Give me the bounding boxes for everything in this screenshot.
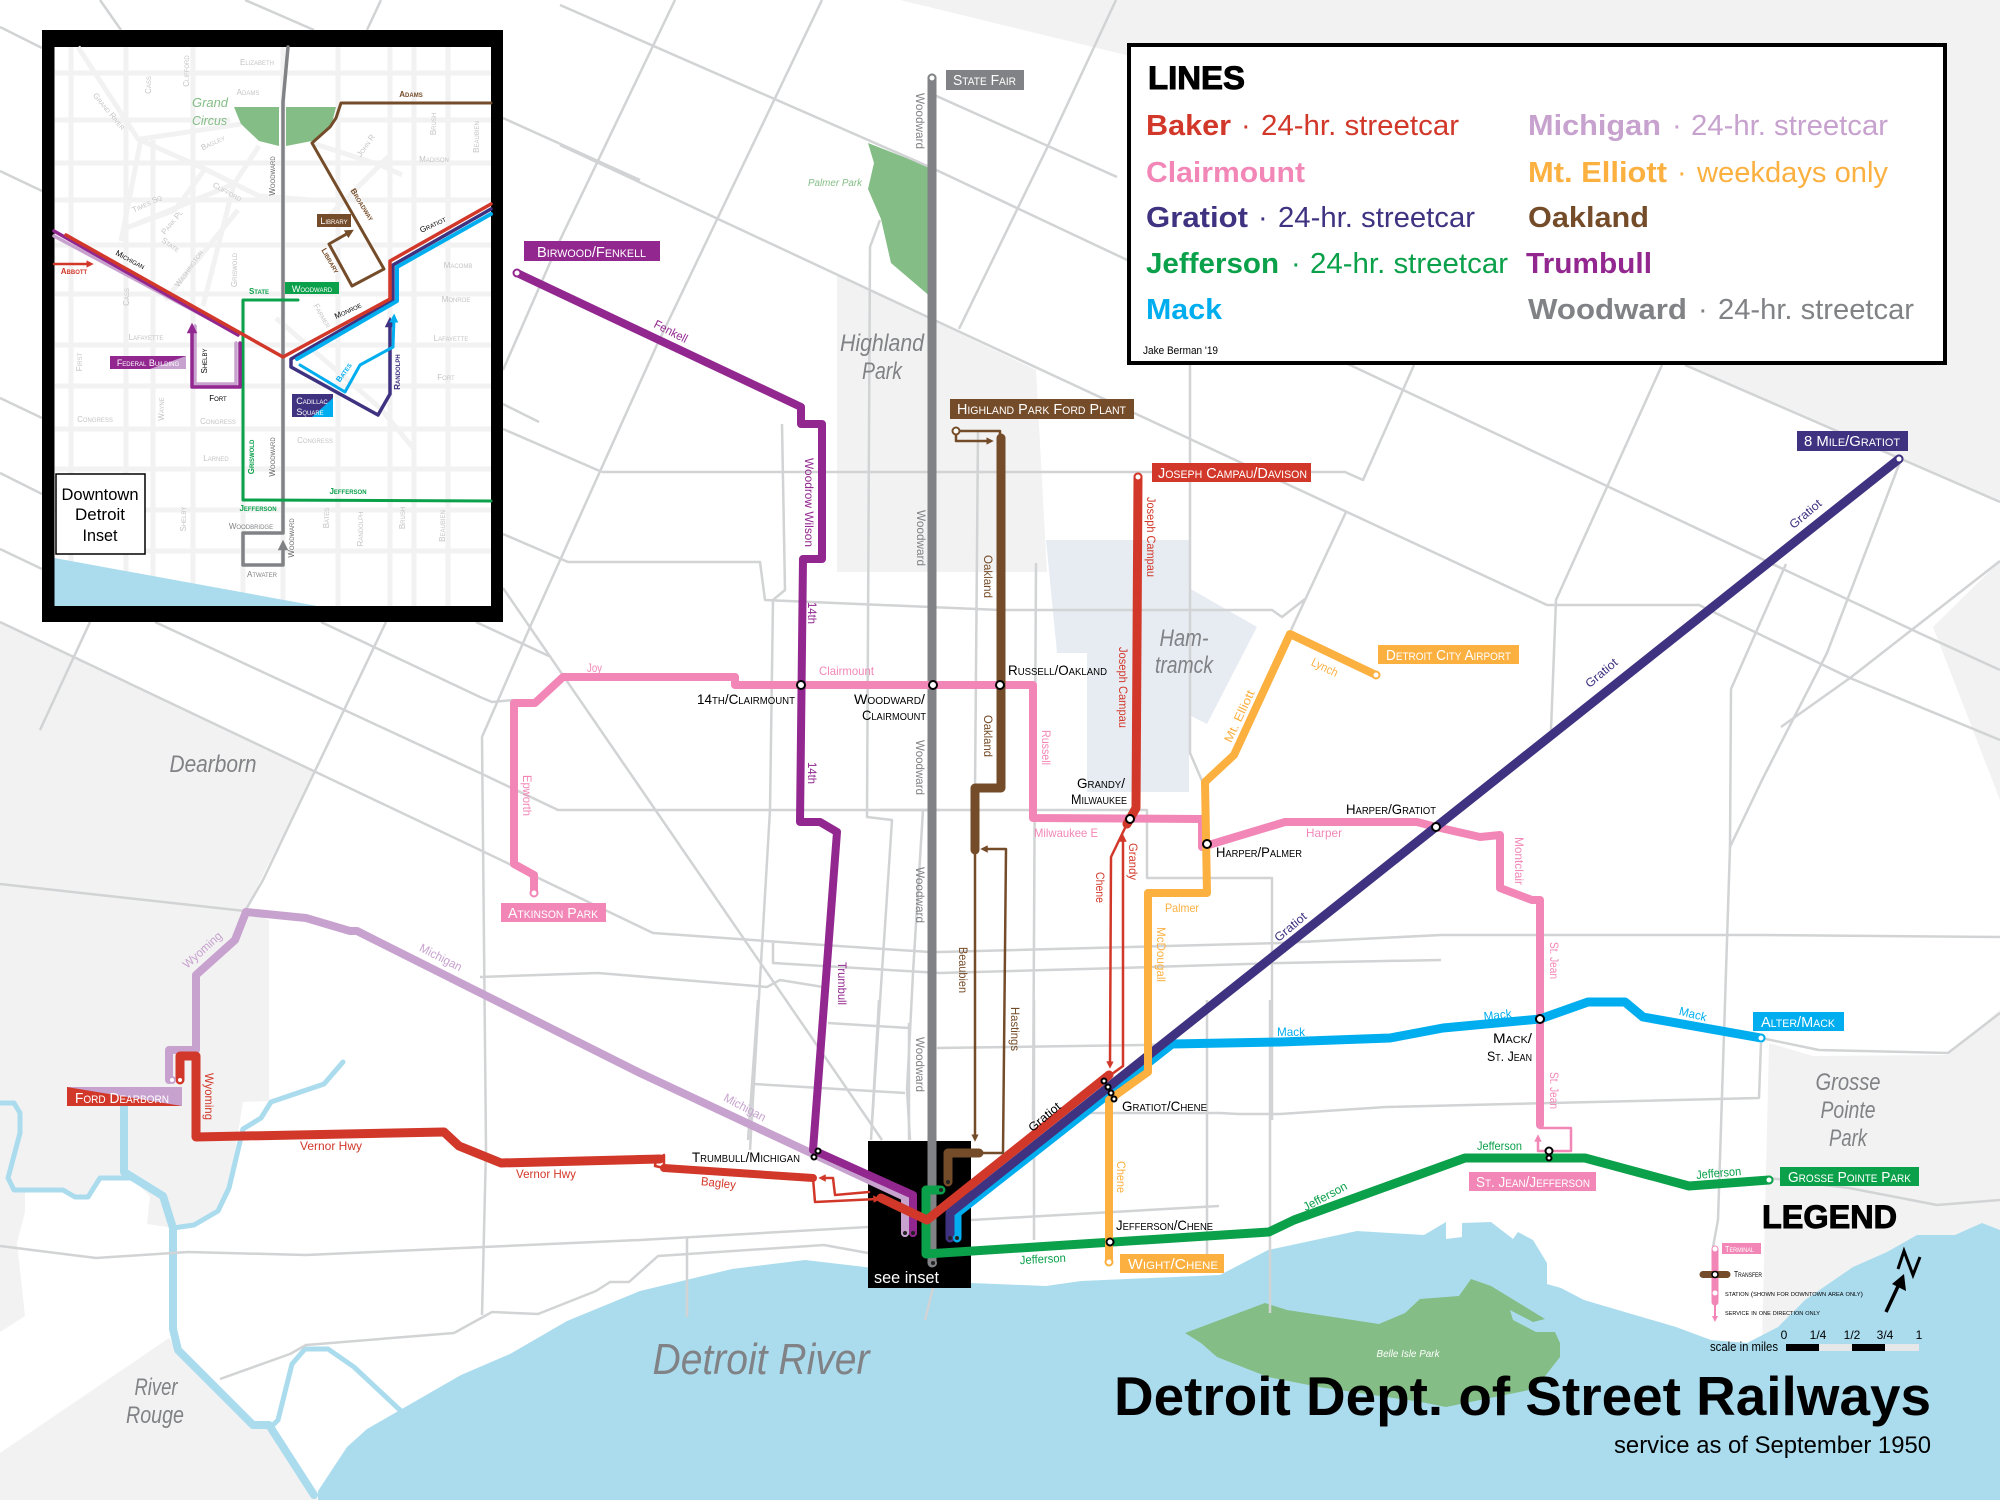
street name labels: Jefferson [1477,1139,1522,1153]
inset street labels: Bagley [200,133,226,152]
transfer station labels: Gratiot/Chene [1122,1098,1207,1114]
city and park names: Highland [840,330,925,357]
inset street grid [55,47,491,606]
inset street labels: John R [355,132,377,159]
key row: Mt. Elliott: · [1677,157,1687,189]
inset street labels: Macomb [444,261,472,270]
inset street labels: Grand River [91,91,127,132]
key row: Mt. Elliott: weekdays only [1696,157,1888,189]
inset street labels: Abbott [61,267,88,276]
key row: Mack: Mack [1146,294,1223,326]
inset street labels: Adams [237,88,259,97]
inset street labels: Farmer [312,302,333,330]
inset label: Woodward [285,282,339,294]
inset street labels: Clifford [211,180,244,203]
city and park names: Detroit River [652,1335,872,1384]
key row: Baker [1146,110,1459,142]
terminal label: Birwood/Fenkell: Birwood/Fenkell [537,244,646,261]
inset street labels [61,55,481,579]
inset street labels: Madison [419,155,449,164]
label: Grand Circus: Grand [192,95,229,110]
inset line: Mack [297,214,491,359]
legend entries: Terminal [1725,1245,1755,1254]
terminal label: Birwood/Fenkell [524,241,660,261]
line: Trumbull [517,273,913,1233]
key row: Clairmount: Clairmount [1146,157,1305,189]
inset line: Trumbull [54,231,240,387]
label: Grand Circus: Circus [192,113,227,128]
city and park names: Belle Isle Park [1376,1349,1440,1360]
terminal label: 8 Mile/Gratiot: 8 Mile/Gratiot [1804,433,1900,450]
inset street labels: Randolph [393,354,402,390]
city and park names: Dearborn [170,751,256,778]
key row: Jefferson: 24-hr. streetcar [1310,248,1508,280]
street name labels: Mack [1678,1004,1709,1025]
key row: Jefferson: Jefferson [1146,248,1279,280]
inset street labels: Woodward [287,518,296,558]
terminal label: Wight/Chene: Wight/Chene [1128,1256,1218,1273]
inset line: Jefferson [243,300,491,501]
transfer station labels: Mack/ [1493,1030,1532,1046]
inset street labels: Congress [297,436,333,445]
inset street labels: Lafayette [434,334,468,343]
line: Gratiot [950,459,1899,1238]
key row: Jefferson: · [1291,248,1301,280]
inset line: Woodward [243,47,288,565]
legend entries [1722,1243,1863,1317]
street name labels: Grandy [1126,843,1140,880]
city and park names: tramck [1155,652,1215,679]
line: Jefferson [926,1158,1769,1254]
city and park names [126,178,1880,1429]
panel: lines key [1129,45,1945,363]
city and park names: Rouge [126,1402,184,1429]
line: Mack [957,1002,1761,1238]
key row: Michigan [1528,110,1888,142]
street name labels: Michigan [721,1090,768,1124]
inset water [54,558,317,606]
heading: legend: LEGEND [1762,1199,1897,1235]
transfer station labels: Harper/Palmer [1216,844,1302,860]
scale bar: 3/4 [1877,1328,1894,1342]
terminal and transfer stations [169,74,1902,1266]
street name labels: Epworth [520,775,534,816]
line: Woodward [928,78,936,1263]
inset label: Woodward: Woodward [292,284,333,294]
line: Clairmount one-way loop [1538,1128,1571,1151]
line: Mt. Elliott [1109,634,1376,1262]
inset street labels: First [75,352,84,371]
inset street labels: Park Pl [159,208,185,236]
inset street labels: Cass [122,288,131,306]
street name labels: Chene [1114,1161,1128,1193]
Belle Isle Park [1185,1279,1560,1407]
street name labels: Mack [1277,1025,1306,1039]
Hamtramck area [1046,540,1257,792]
Grand Circus Park [234,107,336,146]
inset street labels: Congress [200,417,236,426]
inset street labels: Atwater [247,570,278,579]
legend entries: Transfer [1734,1270,1763,1279]
line: Michigan [169,912,905,1233]
transfer station labels: Milwaukee [1071,791,1127,807]
key row: Gratiot: 24-hr. streetcar [1278,202,1475,234]
inset street labels: Elizabeth [240,58,274,67]
legend entries: service in one direction only [1725,1310,1821,1317]
street name labels: Chene [1093,872,1107,903]
Detroit River water [318,1222,2000,1500]
inset label: Library [317,214,351,227]
inset line: Baker [54,204,491,357]
panel: downtown Detroit inset [42,30,503,622]
inset label: Cadillac Square: Cadillac [296,396,328,406]
subtitle: service as of September 1950 [1614,1432,1931,1459]
scale bar: 0 [1781,1328,1788,1342]
inset street labels: Cass [144,76,153,94]
transfer station labels: Harper/Gratiot [1346,801,1436,817]
street name labels [180,93,1825,1267]
street name labels: Jefferson [1019,1251,1066,1267]
street name labels: Montclair [1512,837,1526,885]
inset street labels: Library [319,247,341,275]
street name labels: Bagley [700,1174,737,1192]
transfer station labels: Jefferson/Chene [1116,1217,1213,1233]
scale bar: 1/4 [1810,1328,1827,1342]
inset street labels: Times Sq [131,193,164,215]
key row: Gratiot: Gratiot [1146,202,1248,234]
inset street labels: Jefferson [329,487,367,496]
inset street labels: Michigan [114,248,146,271]
terminal label: Grosse Pointe Park: Grosse Pointe Park [1788,1169,1912,1186]
transfer station labels: St. Jean [1487,1048,1532,1064]
street name labels: McDougall [1154,927,1168,982]
street name labels: Joseph Campau [1116,647,1130,728]
terminal label: Joseph Campau/Davison: Joseph Campau/Davison [1158,465,1307,482]
transfer station labels [692,662,1532,1233]
credit: Jake Berman '19 [1143,345,1218,357]
street name labels: Hastings [1008,1007,1022,1051]
street name labels: Oakland [981,715,995,757]
heading: lines: LINES [1148,60,1245,96]
inset street labels: Griswold [247,439,256,474]
inset label: Cadillac Square [292,394,333,417]
inset street labels: Larned [203,454,229,463]
street name labels: Gratiot [1786,496,1825,532]
inset street labels: State [160,236,181,254]
see inset black box: see inset [874,1268,939,1287]
scale bar: 1 [1916,1328,1923,1342]
inset street labels: Randolph [356,512,365,546]
inset street labels: Gratiot [418,215,448,235]
street name labels: Jefferson [1301,1179,1350,1214]
street name labels: 14th [805,762,819,784]
inset label: Cadillac Square: Square [296,407,324,417]
street name labels: Vernor Hwy [300,1139,362,1153]
key row: Michigan: Michigan [1528,110,1661,142]
key row: Trumbull: Trumbull [1526,248,1652,280]
key row: Baker: Baker [1146,110,1231,142]
transfer station labels: Trumbull/Michigan [692,1149,800,1165]
street name labels: St. Jean [1547,1072,1561,1109]
street name labels: Mack [1483,1006,1513,1023]
street name labels: Joseph Campau [1144,497,1158,577]
inset street labels: Lafayette [129,333,163,342]
inset label: Federal Building: Federal Building [117,358,180,368]
key row: Baker: 24-hr. streetcar [1261,110,1459,142]
street name labels: Vernor Hwy [516,1167,576,1181]
terminal label: Highland Park Ford Plant: Highland Park Ford Plant [957,401,1126,418]
inset street labels: Brush [429,113,438,135]
inset street labels: Congress [77,415,113,424]
terminal label: St. Jean/Jefferson: St. Jean/Jefferson [1476,1174,1590,1191]
inset label: Federal Building [110,356,186,369]
scale bar: scale in miles [1710,1339,1778,1354]
key row: Michigan: · [1672,110,1682,142]
terminal label: Detroit City Airport: Detroit City Airport [1386,647,1511,664]
city and park names: Park [862,358,904,385]
see inset black box [868,1141,971,1288]
transfer station labels: 14th/Clairmount [697,691,795,707]
transfer station labels: Grandy/ [1077,775,1125,791]
city and park names: Ham- [1160,625,1208,652]
inset street labels: Monroe [442,295,470,304]
inset street labels: Fort [209,394,227,403]
inset street labels: Bates [334,361,354,384]
street name labels: Clairmount [819,664,875,678]
inset street labels: Beaubien [438,510,447,542]
terminal label: Ford Dearborn: Ford Dearborn [75,1090,169,1107]
inset line: Michigan [54,236,236,384]
inset street labels: Clifford [182,55,191,87]
inset street labels: Bates [322,508,331,528]
street name labels: Wyoming [180,929,225,971]
inset line: Mack Bates loop [300,318,394,392]
street name labels: Russell [1039,730,1053,765]
scale bar: 1/2 [1844,1328,1861,1342]
Palmer Park [868,143,932,298]
inset street labels: Woodbridge [229,522,273,531]
inset street labels: Broadway [349,187,376,223]
inset street labels: Woodward [268,437,277,477]
key row: Michigan: 24-hr. streetcar [1691,110,1888,142]
key row: Baker: · [1241,110,1251,142]
city and park names: Palmer Park [808,178,863,189]
street name labels: Mt. Elliott [1221,687,1258,745]
terminal label: State Fair: State Fair [953,72,1016,89]
street name labels: Woodward [914,510,928,566]
key row: Gratiot [1146,202,1475,234]
inset street labels: Jefferson [239,504,277,513]
city and park names: River [134,1374,178,1401]
inset line: Oakland [312,103,491,286]
terminal label: Alter/Mack: Alter/Mack [1761,1014,1836,1031]
transfer station labels: Russell/Oakland [1008,662,1107,678]
inset title box: Detroit [75,505,125,524]
key row: Woodward [1528,294,1914,326]
inset street labels: State [249,287,269,296]
street name labels: Milwaukee E [1034,826,1098,840]
inset street labels: Fort [437,373,455,382]
key row: Mt. Elliott [1528,157,1888,189]
terminal label: Atkinson Park: Atkinson Park [508,905,599,922]
inset street labels: Brush [398,507,407,529]
key row: Woodward: · [1698,294,1708,326]
inset street labels: Adams [399,90,423,99]
street name labels: Wyoming [202,1073,216,1120]
street name labels: Gratiot [1582,655,1621,691]
street name labels: Woodward [913,93,927,149]
city and park names: Pointe [1820,1097,1876,1124]
inset street labels: Monroe [333,301,363,321]
panel: legend [1703,1199,1923,1354]
inset street labels: Griswold [230,252,239,287]
transfer station labels: Woodward/ [854,691,925,707]
city and park names: Park [1829,1125,1869,1152]
inset street labels: Beaubien [472,121,481,153]
street name labels: Lynch [1309,655,1340,680]
street name labels: Palmer [1165,901,1199,915]
line: Baker [180,477,1138,1220]
street name labels: Woodward [913,867,927,923]
inset street labels: Shelby [200,348,209,374]
key row: Gratiot: · [1258,202,1268,234]
key row: Woodward: 24-hr. streetcar [1718,294,1914,326]
inset title box: Downtown [62,485,138,504]
line: Clairmount [514,677,1540,1125]
street name labels: Jefferson [1696,1164,1742,1182]
inset title box: Inset [82,526,118,545]
street name labels: Gratiot [1271,909,1310,945]
inset street labels: Washington [173,248,205,289]
inset street labels: Shelby [179,506,188,532]
inset street labels: Wayne [157,397,166,421]
street name labels: Fenkell [652,317,690,346]
transfer station labels: Clairmount [862,707,926,723]
street name labels: Beaubien [956,947,970,993]
street name labels: Woodward [913,1037,927,1092]
label: Grand Circus [192,95,229,128]
city and park names: Grosse [1816,1069,1880,1096]
key row: Oakland: Oakland [1528,202,1649,234]
scale bar [1710,1328,1923,1354]
line: Oakland [948,431,1006,1182]
inset title box [56,474,145,554]
street name labels: Woodrow Wilson [802,458,816,547]
street name labels: Gratiot [1025,1099,1064,1135]
north arrow [1886,1251,1920,1312]
title: Detroit Dept. of Street Railways [1114,1365,1931,1427]
legend entries: station (shown for downtown area only) [1725,1291,1863,1298]
street name labels: Michigan [417,941,464,974]
inset line: Gratiot [291,209,491,415]
street name labels: St. Jean [1547,942,1561,979]
street name labels: Joy [587,661,602,675]
street name labels: 14th [805,602,819,624]
key row: Jefferson [1146,248,1508,280]
legend sample line [1703,1246,1727,1319]
street name labels: Oakland [981,555,995,598]
street name labels: Woodward [913,740,927,795]
key row: Mt. Elliott: Mt. Elliott [1528,157,1667,189]
inset label: Library: Library [320,216,348,226]
street name labels: Harper [1306,826,1342,840]
key row: Woodward: Woodward [1528,294,1687,326]
street name labels: Trumbull [835,962,849,1005]
inset street labels: Woodward [268,156,277,196]
River Rouge channels [0,1062,402,1495]
